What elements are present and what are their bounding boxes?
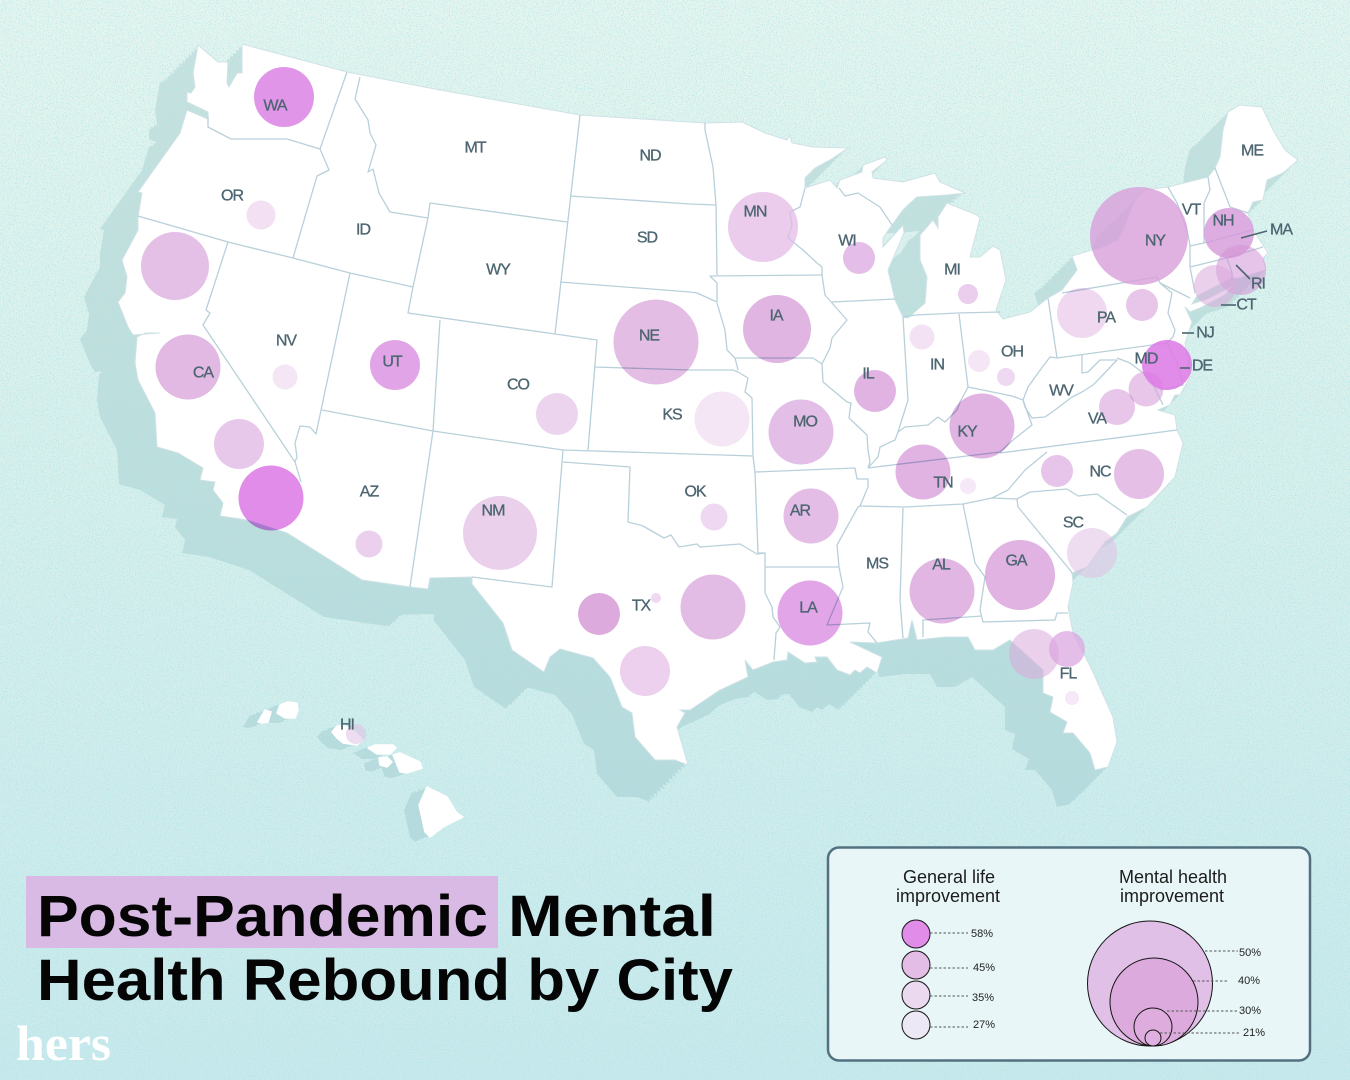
label MT: MT <box>464 140 487 156</box>
bubble: Wisconsin <box>843 242 875 274</box>
title highlight <box>26 876 498 948</box>
label ID: ID <box>356 222 370 238</box>
bubble: Rhode Island <box>1216 245 1266 295</box>
bubble: Tennessee east <box>960 478 976 494</box>
label OR: OR <box>221 188 243 204</box>
label MI: MI <box>944 262 960 278</box>
state borders <box>138 72 1263 660</box>
label CT: CT <box>1236 296 1257 314</box>
bubble: Missouri <box>768 400 834 464</box>
label IA: IA <box>769 308 784 324</box>
label DE: DE <box>1192 358 1212 374</box>
bubble: Oklahoma <box>700 504 728 530</box>
bubble: New Mexico <box>463 496 537 570</box>
bubble: Ohio west <box>968 350 990 372</box>
label MN: MN <box>744 204 767 220</box>
legend: general life 35%: 35% <box>972 992 994 1004</box>
bubble: Illinois <box>854 370 896 412</box>
label TX: TX <box>632 598 652 614</box>
label CO: CO <box>507 376 530 394</box>
label CA: CA <box>193 364 214 382</box>
legend: mental health 30%: 30% <box>1239 1005 1261 1017</box>
bubble: Minnesota <box>728 192 798 262</box>
bubble: New York <box>1090 187 1188 285</box>
bubble: Colorado <box>536 393 578 435</box>
label WY: WY <box>486 262 511 278</box>
legend panel <box>828 848 1310 1060</box>
legend: mental health 50% <box>1088 921 1261 1046</box>
label MS: MS <box>866 556 888 572</box>
bubble: Virginia east <box>1128 372 1164 406</box>
legend heading: mental health improvement: improvement <box>1120 886 1224 906</box>
label WA: WA <box>263 98 288 114</box>
label ND: ND <box>639 148 661 164</box>
legend: general life 58%: 58% <box>971 928 993 940</box>
bubble: South Carolina <box>1067 528 1117 578</box>
bubble: Georgia <box>985 540 1055 610</box>
legend heading: mental health improvement: Mental health <box>1119 867 1227 887</box>
label NV: NV <box>276 332 297 350</box>
bubble: Kentucky <box>950 394 1014 458</box>
label WI: WI <box>838 232 856 250</box>
map of the United States <box>118 44 1298 837</box>
label MA: MA <box>1270 222 1293 238</box>
label IL: IL <box>862 366 875 382</box>
bubble: Central California <box>156 334 220 400</box>
bubble: Louisiana <box>778 580 842 646</box>
label FL: FL <box>1060 666 1077 682</box>
bubble: Connecticut <box>1194 265 1236 307</box>
label NY: NY <box>1145 232 1166 250</box>
bubble: Arkansas <box>784 488 838 544</box>
leader lines for small states <box>1180 231 1267 368</box>
bubble: Florida south <box>1065 691 1079 705</box>
label NC: NC <box>1089 464 1111 480</box>
label SD: SD <box>637 230 658 246</box>
bubble: Pennsylvania east <box>1126 289 1158 321</box>
legend: general life 27% <box>902 1011 995 1039</box>
label AR: AR <box>790 502 811 520</box>
logo: hers: hers <box>16 1015 111 1071</box>
bubble: Massachusetts <box>1204 208 1254 258</box>
legend: mental health 40%: 40% <box>1238 975 1260 987</box>
label KS: KS <box>662 406 682 424</box>
bubble: Nebraska <box>614 300 698 384</box>
label NH: NH <box>1212 212 1234 230</box>
land mass <box>118 44 1298 770</box>
bubble: Indiana <box>910 324 934 350</box>
label SC: SC <box>1063 514 1084 532</box>
bubble: Pennsylvania west <box>1057 288 1107 338</box>
legend: mental health 21% <box>1145 1027 1265 1046</box>
label AZ: AZ <box>360 484 379 500</box>
label GA: GA <box>1005 552 1028 570</box>
bubble: Tennessee west <box>896 444 950 500</box>
bubble: West Texas <box>578 593 620 635</box>
Hawaii islands <box>258 702 463 837</box>
data bubbles <box>141 67 1266 744</box>
bubble: Arizona <box>356 530 382 558</box>
bubble: Michigan <box>958 284 978 304</box>
label PA: PA <box>1097 310 1116 326</box>
label NJ: NJ <box>1196 324 1214 342</box>
bubble: Oregon <box>246 200 276 230</box>
label OK: OK <box>684 484 707 500</box>
bubble: Alabama <box>910 558 974 624</box>
legend: general life 27%: 27% <box>973 1019 995 1031</box>
bubble: Nevada <box>272 364 298 390</box>
label VT: VT <box>1182 202 1201 218</box>
bubble: Florida north-west <box>1009 629 1059 679</box>
label KY: KY <box>957 424 978 440</box>
bubble: North Carolina west <box>1041 455 1073 487</box>
label UT: UT <box>382 354 403 370</box>
bubble: Ohio east <box>997 368 1015 386</box>
bubble: Seattle, WA <box>254 67 314 127</box>
legend: mental health 30% <box>1134 1005 1261 1046</box>
map shadow <box>80 47 1295 842</box>
label NM: NM <box>482 502 505 520</box>
label AL: AL <box>932 556 951 574</box>
legend heading: general life improvement: improvement <box>896 886 1000 906</box>
title line 2: Health Rebound by City <box>37 948 733 1013</box>
legend box <box>828 848 1310 1060</box>
bubble: Hawaii <box>346 724 366 744</box>
label ME: ME <box>1241 142 1263 160</box>
bubble: North Carolina east <box>1114 449 1164 499</box>
bubble: East Texas <box>680 574 746 640</box>
bubble: Utah <box>370 340 420 390</box>
bubble: Maryland <box>1142 340 1192 390</box>
legend: general life 45% <box>902 951 995 979</box>
bubble: South Texas <box>620 646 670 696</box>
label IN: IN <box>930 356 944 374</box>
legend: general life 45%: 45% <box>973 962 995 974</box>
title line 1: Mental <box>508 884 716 949</box>
legend: general life 35% <box>902 981 994 1009</box>
label WV: WV <box>1049 382 1074 400</box>
label TN: TN <box>933 474 953 492</box>
label HI: HI <box>340 716 354 734</box>
title line 1: Post-Pandemic <box>37 884 488 949</box>
legend: mental health 21%: 21% <box>1243 1027 1265 1039</box>
label OH: OH <box>1001 344 1023 360</box>
label RI: RI <box>1251 276 1265 292</box>
bubble: Kansas <box>694 392 750 446</box>
bubble: Southern California <box>238 466 304 530</box>
label MD: MD <box>1135 350 1158 368</box>
bubble: Central Texas small <box>651 593 661 603</box>
label NE: NE <box>639 328 659 344</box>
title <box>26 876 733 1013</box>
legend: mental health 50%: 50% <box>1239 947 1261 959</box>
bubble: Florida north-east <box>1049 631 1085 667</box>
state labels <box>193 98 1293 734</box>
bubble: Iowa <box>743 295 811 363</box>
label VA: VA <box>1088 410 1107 428</box>
bubble: Virginia west <box>1099 389 1135 425</box>
label LA: LA <box>799 600 818 616</box>
legend: mental health 40% <box>1110 958 1260 1046</box>
legend: general life 58% <box>902 920 993 948</box>
bubble: Northern California <box>141 232 209 300</box>
bubble: Inland California <box>214 419 264 469</box>
legend heading: general life improvement: General life <box>903 867 995 887</box>
label MO: MO <box>793 414 817 430</box>
